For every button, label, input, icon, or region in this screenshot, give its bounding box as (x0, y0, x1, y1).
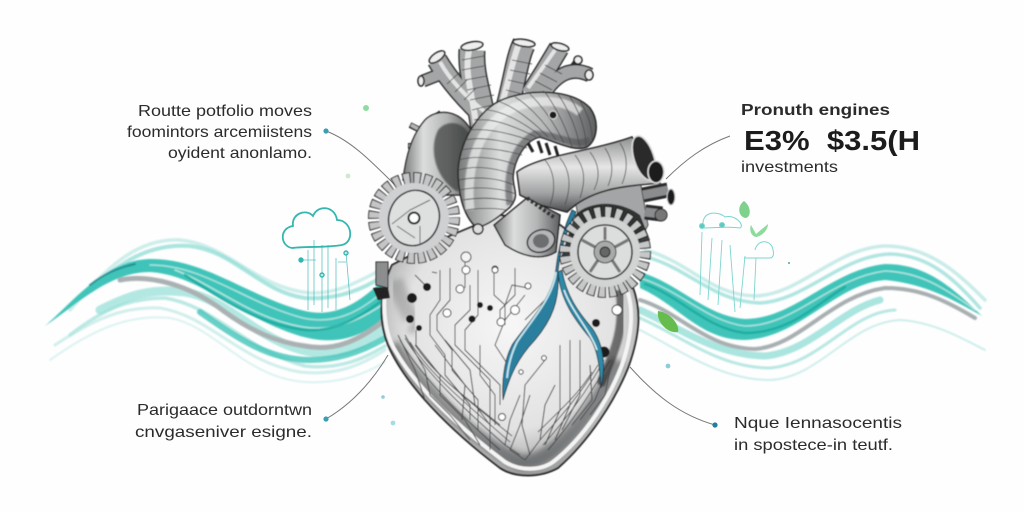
leader line: bottom left (323, 355, 388, 422)
gear shadow (373, 262, 390, 300)
text: bottom left callout: Parigaace outdorntwn (137, 402, 312, 419)
text: top left callout: foomintors arcemiistens (127, 124, 312, 141)
right flowing wave (640, 246, 985, 380)
icon: right cloud with circuits and leaves (700, 201, 773, 312)
leader line: top left (323, 128, 395, 185)
band streaks (150, 265, 385, 320)
main tapered teal band (45, 259, 385, 340)
band streaks (640, 271, 975, 326)
aorta ribs (459, 92, 592, 210)
text: top right callout (741, 102, 920, 176)
icon: left cloud with circuits (283, 208, 350, 312)
icon: leaf top (739, 201, 750, 218)
text: bottom right callout: in spostece-in teutf. (734, 437, 893, 454)
text: top left callout: oyident anonlamo. (168, 145, 312, 162)
heart body (382, 215, 638, 476)
text: top left callout (127, 103, 312, 162)
text: top right callout: Pronuth engines (741, 102, 890, 119)
conus (461, 198, 560, 273)
circuit traces (398, 260, 612, 460)
pulmonary trunk (517, 133, 664, 240)
circuit nodes (443, 266, 622, 420)
vessel caps (418, 38, 593, 86)
under-arch ribs (528, 141, 558, 156)
leader line: top right (666, 136, 730, 179)
left flowing wave (45, 240, 385, 382)
text: bottom right callout: Nque Iennasocentis (734, 415, 902, 432)
text: top right callout: investments (741, 159, 838, 176)
blue ribbons (503, 210, 604, 400)
leader line: bottom right (630, 367, 718, 428)
icon: green leaf (658, 311, 678, 332)
main tapered teal band (640, 264, 982, 340)
heart illustration (373, 38, 675, 475)
left gear (375, 179, 453, 257)
text: top left callout: Routte potfolio moves (138, 103, 312, 120)
edge hatching (400, 338, 610, 450)
top vessels (423, 44, 590, 135)
left atrium (403, 112, 471, 195)
right side tubes (643, 189, 675, 221)
small floating dots (346, 105, 790, 425)
text: bottom right callout (734, 415, 902, 454)
text: bottom left callout (135, 402, 312, 441)
icon: leaf check (750, 224, 768, 237)
aorta (458, 92, 596, 228)
text: top right callout: E3% $3.5(H (744, 125, 920, 156)
text: bottom left callout: cnvgaseniver esigne. (135, 424, 312, 441)
right gear (560, 204, 650, 291)
